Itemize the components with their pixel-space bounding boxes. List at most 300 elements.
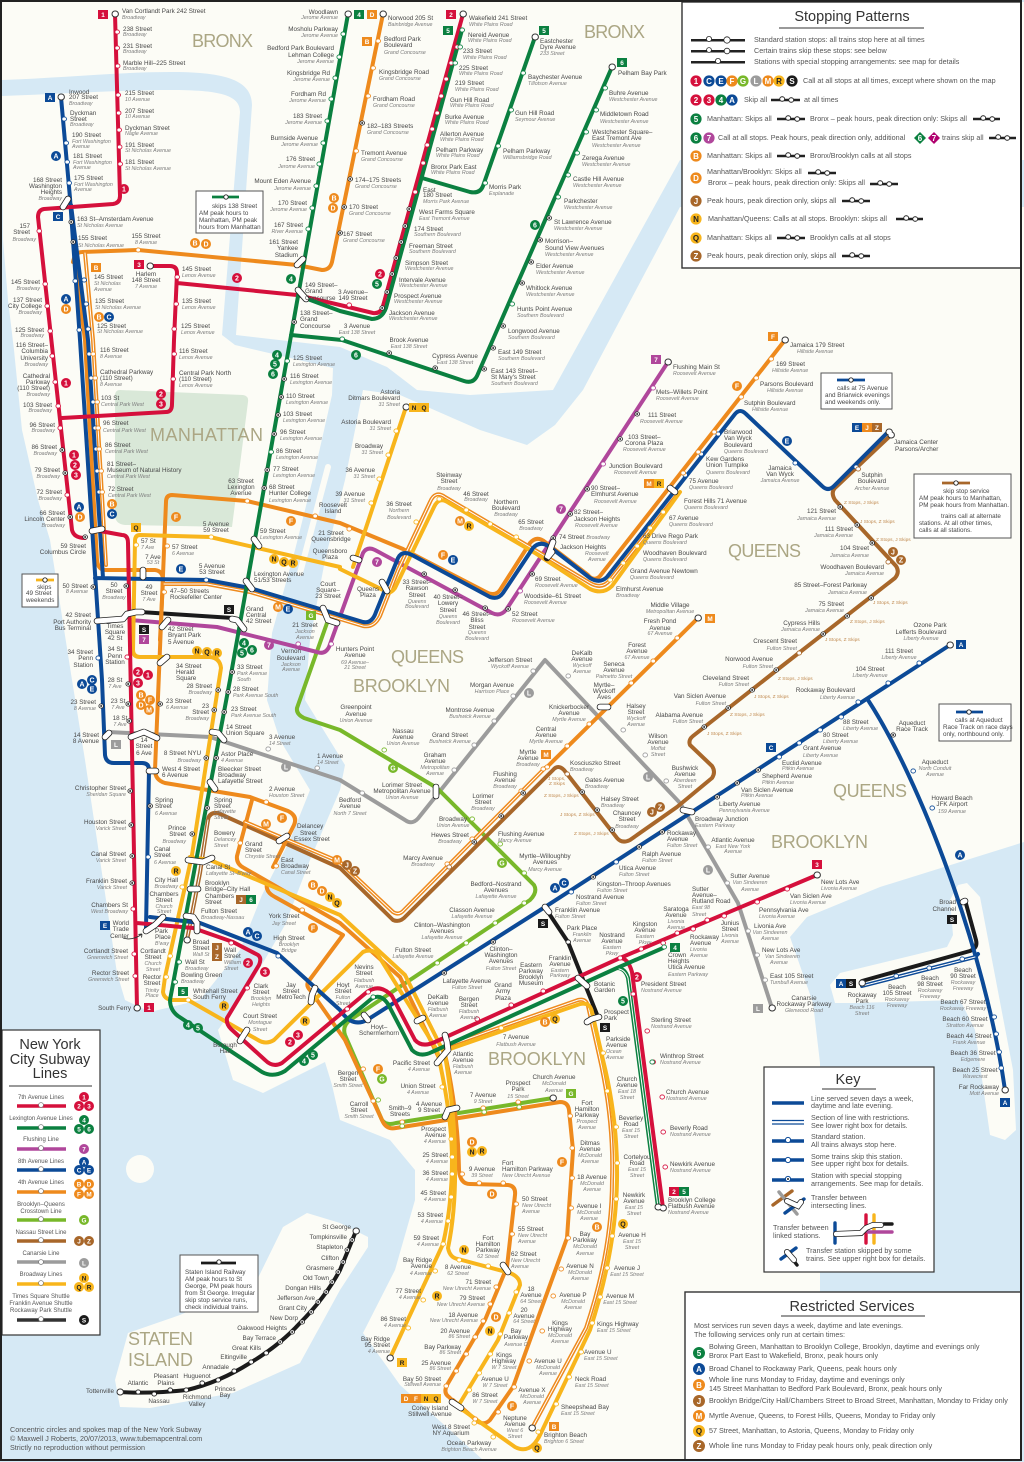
station labels: queens: 36 Avenue bbox=[345, 467, 375, 474]
station labels: queens: 31 Street bbox=[378, 402, 401, 408]
station labels: queens: Woodhaven Boulevard bbox=[820, 564, 884, 571]
panel: stopping patterns: Bronx – peak hours, peak direction only: Skips all bbox=[708, 178, 865, 187]
panel: key: Transfer between bbox=[773, 1223, 829, 1232]
station labels: upper manhattan and bronx: Lehman College bbox=[288, 52, 334, 59]
station labels: upper manhattan and bronx: Broadway bbox=[123, 49, 147, 55]
panel: key: Some trains skip this station. bbox=[811, 1152, 902, 1161]
station labels: upper manhattan and bronx: 96 Street bbox=[29, 422, 55, 429]
station labels: brooklyn: Kings Highway bbox=[597, 1321, 640, 1328]
station labels: brooklyn: McDonald bbox=[561, 1299, 586, 1305]
station labels: midtown and lower manhattan: Street bbox=[157, 909, 172, 915]
station labels: upper manhattan and bronx: Boulevard bbox=[384, 42, 413, 49]
route badges: circles: M bbox=[146, 708, 152, 714]
route badges: circles: Q bbox=[204, 650, 210, 656]
station labels: midtown and lower manhattan: Montague bbox=[248, 1020, 272, 1026]
central park bbox=[115, 390, 248, 527]
line panel badges: S bbox=[82, 1318, 87, 1324]
station labels: queens: Avenue– bbox=[692, 892, 717, 899]
station labels: queens: Roosevelt Avenue bbox=[535, 583, 578, 589]
station labels: queens: Rockaway Boulevard bbox=[796, 687, 855, 694]
station labels: midtown and lower manhattan: Essex Street bbox=[294, 836, 330, 843]
station labels: queens: 31 Street bbox=[344, 498, 366, 504]
station labels: brooklyn: Parkway bbox=[504, 1334, 529, 1341]
station labels: brooklyn: Avenue bbox=[665, 912, 687, 919]
station labels: upper manhattan and bronx: 180 Street bbox=[423, 192, 452, 199]
station labels: brooklyn: Parkway bbox=[573, 1237, 598, 1244]
station labels: upper manhattan and bronx: Whitlock Avenue bbox=[526, 285, 573, 292]
station labels: upper manhattan and bronx: 86 Street bbox=[31, 444, 57, 451]
station labels: upper manhattan and bronx: East 138 Street bbox=[339, 330, 376, 336]
station labels: upper manhattan and bronx: 170 Street bbox=[349, 204, 378, 211]
station labels: queens: Queens Boulevard bbox=[669, 522, 714, 528]
station labels: staten island: Annadale bbox=[202, 1364, 229, 1371]
station labels: brooklyn: 4 Avenue bbox=[410, 1271, 432, 1277]
route badges: circles: 5 bbox=[273, 362, 277, 368]
route badges: circles: C bbox=[109, 512, 115, 518]
station labels: brooklyn: Nostrand Avenue bbox=[670, 1132, 711, 1138]
station labels: midtown and lower manhattan: Bowery bbox=[214, 830, 236, 837]
station labels: upper manhattan and bronx: Marble Hill–225 Street bbox=[123, 60, 186, 67]
station labels: brooklyn: 39 Street bbox=[471, 1173, 493, 1179]
skip stop notes: J Stops, bbox=[548, 776, 565, 782]
station labels: queens: East New York bbox=[716, 844, 751, 850]
station labels: queens: Street bbox=[440, 607, 457, 614]
panel: key: intersecting lines. bbox=[811, 1201, 867, 1210]
station labels: brooklyn: Ocean Parkway bbox=[447, 1440, 492, 1447]
station labels: queens: Cleveland Street bbox=[702, 675, 749, 682]
station labels: midtown and lower manhattan: 103 Street bbox=[283, 411, 312, 418]
panel: stopping patterns: Skip all bbox=[744, 95, 768, 104]
station labels: upper manhattan and bronx: White Plains Road bbox=[459, 71, 504, 77]
station labels: brooklyn: Road bbox=[623, 1121, 639, 1128]
route badges: circles: 4 bbox=[289, 276, 293, 284]
station labels: queens: Roosevelt Avenue bbox=[512, 618, 555, 624]
station labels: midtown and lower manhattan: Greenwich Street bbox=[87, 955, 129, 961]
6th avenue lines B D F M bbox=[155, 340, 785, 1423]
station labels: queens: Queens bbox=[439, 614, 458, 620]
station labels: midtown and lower manhattan: Brooklyn bbox=[251, 996, 271, 1002]
panel: key: See lower right box for details. bbox=[811, 1121, 908, 1130]
station labels: upper manhattan and bronx: 10 Avenue bbox=[125, 114, 150, 120]
station labels: midtown and lower manhattan: Jay Street bbox=[271, 921, 296, 927]
station labels: brooklyn: Broadway bbox=[585, 784, 609, 790]
station labels: midtown and lower manhattan: Chambers bbox=[205, 893, 234, 900]
station labels: midtown and lower manhattan: 34 Street bbox=[176, 663, 202, 670]
station labels: midtown and lower manhattan: Franklin Street bbox=[86, 878, 127, 885]
station labels: midtown and lower manhattan: 21 Street bbox=[343, 665, 366, 671]
station labels: brooklyn: Army bbox=[496, 988, 511, 995]
station labels: upper manhattan and bronx: Lenox Avenue bbox=[182, 273, 216, 279]
square route markers: E bbox=[103, 923, 108, 930]
station labels: upper manhattan and bronx: Broadway bbox=[20, 333, 44, 339]
station labels: upper manhattan and bronx: Westchester Avenue bbox=[554, 226, 603, 232]
station labels: brooklyn: 15 Street bbox=[507, 1094, 529, 1100]
station labels: queens: Ditmars Boulevard bbox=[348, 395, 400, 402]
station labels: upper manhattan and bronx: Cathedral Parkway bbox=[100, 369, 154, 376]
station labels: brooklyn: Avenue J bbox=[614, 1265, 640, 1272]
station labels: midtown and lower manhattan: Lexington Avenue bbox=[269, 498, 311, 504]
station labels: upper manhattan and bronx: 170 Street bbox=[278, 200, 307, 207]
station labels: upper manhattan and bronx: Norwood 205 St bbox=[388, 15, 433, 22]
skip stop notes: Z Skips bbox=[549, 781, 566, 787]
station labels: brooklyn: Flatbush Avenue bbox=[496, 1042, 536, 1048]
station labels: brooklyn: Avenue bbox=[616, 1082, 638, 1089]
station labels: brooklyn: Lorimer bbox=[472, 793, 494, 800]
station labels: upper manhattan and bronx: St Nicholas bbox=[94, 281, 121, 287]
route badges: circles: B bbox=[310, 882, 316, 890]
station labels: upper manhattan and bronx: Dyre Avenue bbox=[540, 44, 576, 51]
station labels: midtown and lower manhattan: Broadway bbox=[218, 772, 247, 779]
station labels: queens: 75 Street bbox=[818, 601, 844, 608]
route badges: circles: 3 bbox=[296, 1032, 300, 1040]
station labels: brooklyn: W 7 Street bbox=[472, 1399, 498, 1405]
square route markers: 1 bbox=[101, 12, 105, 19]
station labels: queens: 121 Street bbox=[807, 508, 836, 515]
route badges: circles: 2 bbox=[136, 670, 140, 676]
station labels: midtown and lower manhattan: Street bbox=[169, 831, 186, 838]
station labels: queens: Liberty Avenue bbox=[903, 636, 939, 642]
route badges: circles: 3 bbox=[159, 402, 163, 408]
station labels: queens: Jamaica Avenue bbox=[829, 553, 869, 559]
station labels: upper manhattan and bronx: Avenue bbox=[73, 187, 92, 193]
panel: key: All trains always stop here. bbox=[811, 1140, 896, 1149]
station labels: staten island: Clifton bbox=[321, 1255, 339, 1262]
station labels: upper manhattan and bronx: 157 bbox=[19, 223, 30, 230]
station labels: midtown and lower manhattan: Port Authority bbox=[53, 619, 92, 626]
station labels: midtown and lower manhattan: 7 Ave bbox=[141, 545, 154, 551]
station labels: brooklyn: East 15 Street bbox=[610, 1272, 644, 1278]
station labels: brooklyn: 18 bbox=[527, 1286, 535, 1293]
station labels: queens: Harrison Place bbox=[475, 689, 509, 695]
station labels: midtown and lower manhattan: 42 St bbox=[108, 635, 123, 642]
station labels: midtown and lower manhattan: 51/53 Streets bbox=[254, 577, 291, 584]
station labels: midtown and lower manhattan: Street bbox=[146, 967, 161, 973]
station labels: queens: Broad bbox=[939, 899, 956, 906]
station labels: queens: Mets–Willets Point bbox=[656, 389, 708, 396]
station labels: midtown and lower manhattan: Astor Place bbox=[221, 751, 254, 758]
station labels: queens: Eastern Parkway bbox=[695, 823, 735, 829]
station labels: brooklyn: Avenue bbox=[504, 1421, 526, 1428]
line panel badges: 7 bbox=[82, 1146, 86, 1154]
panel: stopping patterns: Manhattan: Skips all bbox=[707, 151, 772, 160]
station labels: queens: Street bbox=[628, 709, 645, 716]
square route markers: 5 bbox=[682, 1189, 686, 1196]
station labels: queens: Pitkin Avenue bbox=[741, 793, 773, 799]
stopping patterns badges: R bbox=[776, 77, 782, 86]
station labels: midtown and lower manhattan: World bbox=[113, 920, 129, 927]
station labels: upper manhattan and bronx: Zerega Avenue bbox=[582, 155, 625, 162]
station labels: brooklyn: Museum bbox=[519, 980, 543, 987]
station labels: midtown and lower manhattan: 5 Avenue bbox=[168, 639, 195, 646]
route badges: circles: L bbox=[284, 764, 289, 772]
station labels: brooklyn: Avenue bbox=[575, 1251, 594, 1257]
station labels: brooklyn: Avenue bbox=[459, 1015, 478, 1021]
panel: key: Transfer between bbox=[811, 1193, 867, 1202]
station labels: brooklyn: Beverly Road bbox=[670, 1125, 708, 1132]
station labels: midtown and lower manhattan: Varick Street bbox=[96, 826, 127, 832]
station labels: midtown and lower manhattan: Spring bbox=[214, 797, 233, 804]
square route markers: J bbox=[865, 425, 869, 432]
station labels: brooklyn: East 15 Street bbox=[575, 1383, 609, 1389]
station labels: brooklyn: Bay Ridge bbox=[361, 1336, 390, 1343]
nassau line J Z bbox=[208, 435, 898, 921]
station labels: queens: Jackson Heights bbox=[574, 516, 620, 523]
station labels: queens: Freeway bbox=[887, 1003, 908, 1009]
district names: STATEN bbox=[128, 1329, 193, 1349]
station labels: midtown and lower manhattan: 8 Avenue bbox=[74, 706, 96, 712]
station labels: upper manhattan and bronx: 8 Avenue bbox=[66, 589, 88, 595]
station labels: midtown and lower manhattan: 59 Street bbox=[260, 528, 286, 535]
station labels: upper manhattan and bronx: Street bbox=[13, 229, 30, 236]
station labels: brooklyn: Brooklyn bbox=[519, 974, 544, 981]
route badges: circles: D bbox=[63, 306, 69, 314]
station labels: brooklyn: Crown bbox=[668, 952, 687, 959]
square route markers: J bbox=[215, 945, 219, 952]
station labels: midtown and lower manhattan: Lafayette St–B'way bbox=[206, 871, 252, 877]
station labels: midtown and lower manhattan: Street bbox=[214, 803, 231, 810]
station labels: midtown and lower manhattan: Court bbox=[320, 581, 336, 588]
station labels: brooklyn: 62 Street bbox=[511, 1251, 537, 1258]
stopping patterns badges: M bbox=[765, 77, 772, 86]
station labels: midtown and lower manhattan: Wall St bbox=[185, 959, 205, 966]
canarsie line L bbox=[108, 660, 772, 1008]
route badges: circles: J bbox=[921, 512, 925, 518]
station labels: brooklyn: North 7 Street bbox=[334, 811, 367, 817]
station labels: brooklyn: Neptune bbox=[503, 1415, 527, 1422]
station labels: upper manhattan and bronx: Westchester Avenue bbox=[609, 97, 658, 103]
station labels: upper manhattan and bronx: Broadway bbox=[26, 392, 50, 398]
station labels: brooklyn: Avenue bbox=[411, 1263, 432, 1270]
panel: new york city subway lines: Brooklyn–Queens bbox=[17, 1202, 65, 1208]
station labels: brooklyn: Lafayette Avenue bbox=[393, 954, 434, 960]
station labels: brooklyn: Park bbox=[512, 1086, 525, 1093]
station labels: midtown and lower manhattan: Street bbox=[224, 953, 241, 960]
route badges: circles: B bbox=[594, 1224, 600, 1232]
station labels: queens: Van Sindeeren bbox=[733, 880, 767, 886]
station labels: queens: Broadway bbox=[437, 486, 461, 492]
station labels: queens: Street bbox=[409, 592, 426, 599]
route badges: circles: Q bbox=[334, 900, 340, 908]
station labels: queens: Kew Gardens bbox=[706, 456, 744, 463]
station labels: midtown and lower manhattan: Canal Street bbox=[91, 851, 126, 858]
station labels: brooklyn: McDonald bbox=[548, 1333, 573, 1339]
station labels: brooklyn: Botanic bbox=[594, 981, 615, 988]
stopping patterns badges: G bbox=[740, 77, 746, 86]
station labels: queens: Far Rockaway bbox=[959, 1084, 1000, 1091]
station labels: brooklyn: Broadway bbox=[438, 839, 462, 845]
route badges: circles: D bbox=[489, 1192, 495, 1198]
arrow to world trade center bbox=[123, 934, 142, 939]
station labels: midtown and lower manhattan: 34 Street bbox=[67, 649, 93, 656]
skip stop notes: J Stops, Z Skips bbox=[560, 812, 595, 818]
route badges: circles: C bbox=[254, 934, 260, 940]
station labels: queens: Beach 25 Street bbox=[952, 1067, 998, 1074]
station labels: upper manhattan and bronx: Jerome Avenue bbox=[269, 207, 307, 213]
route badges: circles: D bbox=[469, 1140, 475, 1146]
square route markers: Q bbox=[422, 405, 427, 412]
station labels: queens: Wyckoff bbox=[593, 688, 615, 695]
station labels: brooklyn: Utica Avenue bbox=[668, 964, 705, 971]
station labels: brooklyn: Kingston bbox=[633, 921, 658, 928]
key transfer icons bbox=[773, 1191, 892, 1265]
station labels: queens: Aves bbox=[597, 694, 611, 701]
station labels: upper manhattan and bronx: (110 Street) bbox=[100, 375, 133, 382]
route badges: circles: C bbox=[561, 880, 567, 888]
station labels: brooklyn: Avenue bbox=[425, 771, 444, 777]
callout boxes: skip stop service runs, bbox=[185, 1297, 248, 1304]
station labels: midtown and lower manhattan: Street bbox=[154, 852, 171, 859]
route badges: circles: E bbox=[827, 382, 832, 388]
station labels: upper manhattan and bronx: Broadway bbox=[69, 101, 93, 107]
district names: BROOKLYN bbox=[488, 1049, 586, 1069]
route badges: circles: R bbox=[221, 1004, 227, 1010]
station labels: midtown and lower manhattan bbox=[53, 355, 374, 1055]
station labels: midtown and lower manhattan: Street bbox=[214, 815, 229, 821]
callout boxes: and Briarwick evenings bbox=[825, 392, 890, 399]
panel: new york city subway lines: Canarsie Line bbox=[22, 1251, 60, 1257]
station labels: brooklyn: Lafayette Avenue bbox=[443, 978, 492, 985]
square route markers: Q bbox=[134, 525, 139, 532]
station labels: upper manhattan and bronx: Westchester Avenue bbox=[405, 266, 454, 272]
station labels: brooklyn: 53 Street bbox=[417, 1212, 443, 1219]
station labels: midtown and lower manhattan: Jackson bbox=[294, 629, 315, 635]
station labels: brooklyn: Fulton Street bbox=[452, 985, 483, 991]
station labels: upper manhattan and bronx: Sound View Avenues bbox=[545, 245, 604, 252]
credits text: © Maxwell J Roberts, 20/07/2013, www.tubemapcentral.com bbox=[10, 1434, 202, 1443]
station labels: midtown and lower manhattan: Avenue bbox=[281, 667, 300, 673]
station labels: midtown and lower manhattan: 116 Street bbox=[290, 373, 319, 380]
station labels: midtown and lower manhattan: Plaza bbox=[322, 554, 338, 561]
station labels: midtown and lower manhattan: Sheridan Square bbox=[86, 792, 126, 798]
station labels: queens: Flushing Main St bbox=[673, 364, 720, 371]
square route markers: B bbox=[552, 1424, 557, 1431]
station labels: upper manhattan and bronx: Harlem bbox=[136, 271, 156, 278]
callout boxes: Race Track on race days bbox=[943, 724, 1013, 731]
station labels: queens: Roosevelt Avenue bbox=[673, 371, 716, 377]
station labels: brooklyn: Aberdeen bbox=[673, 778, 697, 784]
station labels: upper manhattan and bronx: 174–175 Streets bbox=[355, 177, 401, 184]
station labels: queens: Norwood Avenue bbox=[725, 656, 773, 663]
route badges: circles: J bbox=[345, 862, 349, 870]
station labels: queens: Myrtle Avenue bbox=[552, 717, 586, 723]
station labels: queens: Fulton Street bbox=[743, 664, 774, 670]
station labels: staten island: New Dorp bbox=[270, 1315, 298, 1322]
stopping patterns badges: B bbox=[693, 152, 699, 161]
station labels: queens: Liberty Avenue bbox=[820, 695, 855, 701]
station labels: upper manhattan and bronx: White Plains Road bbox=[431, 170, 476, 176]
station labels: upper manhattan and bronx: Jerome Avenue bbox=[300, 33, 338, 39]
route badges: circles: E bbox=[451, 558, 456, 564]
station labels: midtown and lower manhattan: Lexington Avenue bbox=[290, 380, 332, 386]
station labels: upper manhattan and bronx: 125 Street bbox=[97, 323, 126, 330]
station labels: queens: Avenue bbox=[649, 625, 671, 632]
station labels: brooklyn: Fulton Street bbox=[642, 858, 673, 864]
station labels: midtown and lower manhattan: 110 Street bbox=[286, 393, 315, 400]
station labels: midtown and lower manhattan: West Broadway bbox=[91, 909, 128, 915]
station labels: queens: Avenue bbox=[689, 953, 708, 959]
station labels: brooklyn: Eastern Parkway bbox=[668, 972, 708, 978]
station labels: upper manhattan and bronx: River Avenue bbox=[271, 229, 303, 235]
flushing line 7 bbox=[130, 362, 668, 653]
station labels: midtown and lower manhattan: Lexington bbox=[227, 484, 255, 491]
station labels: queens: Queens Boulevard bbox=[643, 557, 688, 563]
station labels: queens: Halsey bbox=[626, 703, 646, 710]
station labels: brooklyn: Brooklyn College bbox=[668, 1197, 716, 1204]
station labels: midtown and lower manhattan: Canal bbox=[154, 846, 170, 853]
station labels: upper manhattan and bronx: 116 Street– bbox=[16, 342, 48, 349]
station labels: midtown and lower manhattan: 14 Street bbox=[317, 760, 339, 766]
station labels: staten island: Great Kills bbox=[232, 1345, 261, 1352]
station labels: midtown and lower manhattan: Christopher Street bbox=[75, 785, 126, 792]
station labels: queens: 63 Drive Rego Park bbox=[643, 533, 699, 540]
station labels: midtown and lower manhattan: Wall bbox=[224, 947, 236, 954]
station labels: upper manhattan and bronx: East Tremont Avenue bbox=[419, 216, 470, 222]
station labels: midtown and lower manhattan: 18 St bbox=[113, 715, 128, 722]
panel: restricted services bbox=[685, 1292, 1021, 1460]
station labels: queens: Liberty Avenue bbox=[852, 673, 888, 679]
station labels: brooklyn: 86 Street bbox=[430, 1366, 452, 1372]
lexington avenue lines 4 5 6 bbox=[170, 14, 663, 1207]
station labels: queens: Sutter bbox=[692, 886, 709, 893]
station labels: queens: Fulton Street bbox=[696, 701, 727, 707]
station labels: brooklyn: Heights bbox=[668, 958, 689, 965]
route badges: circles: 1 bbox=[72, 452, 76, 460]
station labels: midtown and lower manhattan: Court Street bbox=[243, 1013, 277, 1020]
square route markers: 2 bbox=[449, 12, 453, 19]
station labels: midtown and lower manhattan: Street bbox=[144, 980, 161, 987]
route badges: circles: 5 bbox=[311, 1052, 315, 1060]
station labels: upper manhattan and bronx: West Farms Square bbox=[419, 209, 475, 216]
panel: restricted services: The following services only run at certain times: bbox=[694, 1330, 845, 1339]
line panel badges: 5 bbox=[77, 1126, 81, 1134]
station labels: upper manhattan and bronx: Westchester Avenue bbox=[600, 119, 649, 125]
station labels: brooklyn: Beverley bbox=[619, 1115, 644, 1122]
route badges: circles: 6 bbox=[271, 372, 275, 378]
station labels: queens: Livonia bbox=[690, 947, 707, 953]
station labels: brooklyn: Sterling Street bbox=[651, 1017, 691, 1024]
station labels: queens: Fresh Pond bbox=[644, 618, 677, 625]
station labels: midtown and lower manhattan: 125 Street bbox=[293, 355, 322, 362]
square route markers: S bbox=[541, 921, 546, 928]
station labels: queens: Van Sindeeren bbox=[765, 954, 800, 960]
panel: stopping patterns: Stopping Patterns bbox=[794, 9, 910, 25]
station labels: queens: Aqueduct bbox=[899, 720, 926, 727]
station labels: upper manhattan and bronx: 167 Street bbox=[343, 231, 372, 238]
station labels: queens: Grant Avenue bbox=[803, 745, 842, 752]
stopping patterns badges: 6 bbox=[918, 134, 923, 143]
panel: key: trains. See upper right box for details. bbox=[806, 1254, 925, 1263]
station labels: upper manhattan and bronx: 10 Avenue bbox=[125, 97, 150, 103]
station labels: midtown and lower manhattan: South Ferry bbox=[193, 994, 227, 1001]
station labels: upper manhattan and bronx: Southern Boulevard bbox=[414, 232, 462, 238]
route badges: circles: 2 bbox=[378, 272, 382, 278]
square route markers: M bbox=[646, 481, 652, 488]
station labels: queens: 69 Street bbox=[535, 576, 561, 583]
station labels: midtown and lower manhattan: Square– bbox=[316, 587, 340, 594]
station labels: midtown and lower manhattan: Street bbox=[141, 590, 158, 597]
station labels: brooklyn: East 15 Street bbox=[603, 1300, 637, 1306]
station labels: brooklyn: 62 Street bbox=[477, 1254, 499, 1260]
station labels: upper manhattan and bronx: 167 Street bbox=[274, 222, 303, 229]
station labels: queens: Parsons Boulevard bbox=[760, 381, 814, 388]
station labels: queens: Hillside Avenue bbox=[772, 368, 808, 374]
station labels: midtown and lower manhattan: Bowling Green bbox=[181, 972, 223, 979]
station labels: brooklyn: Nevins bbox=[354, 964, 374, 971]
panel: stopping patterns: Manhattan: Skips all bbox=[707, 233, 772, 242]
station labels: brooklyn: Franklin bbox=[573, 932, 591, 938]
panel: new york city subway lines: City Subway bbox=[10, 1052, 91, 1068]
stopping patterns badges: L bbox=[754, 77, 759, 86]
